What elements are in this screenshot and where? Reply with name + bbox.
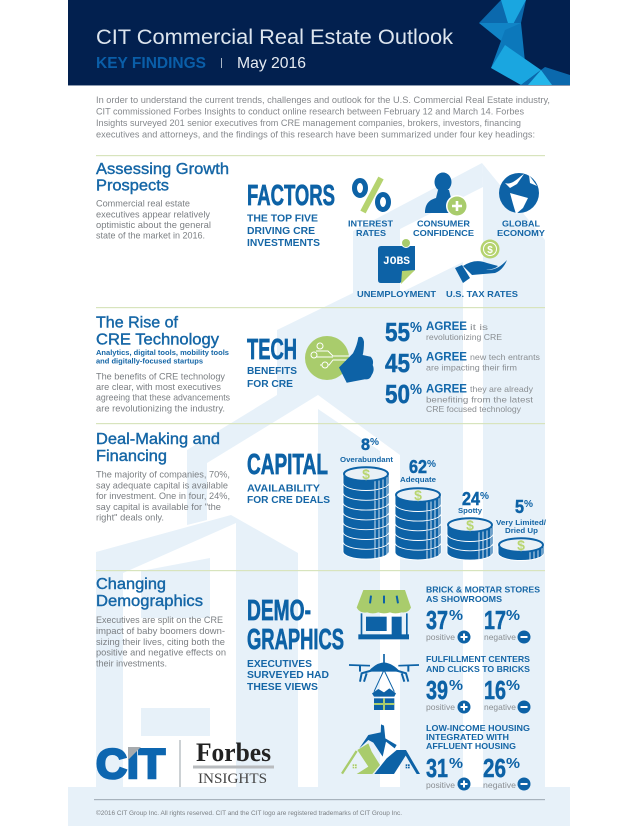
label: fulfillment centers: FULFILLMENT CENTERS <box>426 654 530 664</box>
heading <box>96 161 229 195</box>
stat: 17 percent negative: negative <box>484 632 516 642</box>
label: fulfillment centers <box>426 654 530 674</box>
logo: CIT: CIT <box>96 740 165 787</box>
label: low-income housing: INTEGRATED WITH <box>426 732 509 742</box>
stat: 17 percent negative: % <box>506 607 520 624</box>
label: 24 percent spotty <box>458 489 489 515</box>
body text: are revolutionizing the industry. <box>96 403 225 413</box>
label: brick and mortar: AS SHOWROOMS <box>426 594 502 604</box>
demographics subheading: SURVEYED HAD <box>247 670 329 681</box>
stat: 50 percent: % <box>410 381 422 398</box>
stat: 37 percent positive: % <box>449 607 463 624</box>
stat: 26 percent negative: % <box>506 755 520 772</box>
body text <box>96 199 211 241</box>
stat: 31 percent positive <box>426 753 470 790</box>
stat: 50 percent: benefiting from the latest <box>426 394 534 404</box>
demographics subheading: THESE VIEWS <box>247 682 318 693</box>
stat: 31 percent positive: positive <box>426 780 455 790</box>
body text: executives appear relatively <box>96 209 210 219</box>
label: low-income housing: LOW-INCOME HOUSING <box>426 723 530 733</box>
body text: say capital is available for "the <box>96 502 221 512</box>
label: 8 percent overabundant <box>340 435 393 464</box>
body text <box>96 371 230 413</box>
label: global economy: GLOBAL <box>502 219 540 229</box>
body text: are clear, with most executives <box>96 382 221 392</box>
stat: 17 percent negative <box>484 605 530 644</box>
stat: 16 percent negative <box>484 675 530 714</box>
body text: sizing their lives, citing both the <box>96 637 225 647</box>
header banner <box>68 0 570 86</box>
heading: Prospects <box>96 178 169 195</box>
label: 5 percent very limited <box>496 497 547 535</box>
label: 5 percent very limited: % <box>524 499 533 510</box>
subheading: and digitally-focused startups <box>96 357 203 366</box>
background house watermark <box>68 163 570 826</box>
stat: 39 percent positive: % <box>449 677 463 694</box>
capital subheading: FOR CRE DEALS <box>247 495 330 506</box>
icon: hand with coin <box>455 240 507 283</box>
coin stack: spotty <box>447 517 493 560</box>
icon: houses <box>342 724 420 774</box>
stat: 50 percent: AGREE <box>426 384 467 396</box>
subtitle <box>96 55 306 72</box>
label: 5 percent very limited: 5 <box>515 497 524 517</box>
stat: 37 percent positive: 37 <box>426 605 448 635</box>
icon: jobs <box>378 238 415 284</box>
demographics heading: DEMO- <box>247 595 311 627</box>
coin stack: overabundant <box>343 466 389 559</box>
panel: assessing growth prospects <box>96 161 229 241</box>
body text: impact of baby boomers down- <box>96 626 225 636</box>
label: global economy: ECONOMY <box>497 228 545 238</box>
logo: Forbes Insights: Forbes <box>196 738 271 767</box>
stat: 50 percent: CRE focused technology <box>426 404 522 414</box>
tech subheading <box>247 366 297 390</box>
capital subheading <box>247 484 330 506</box>
label: 8 percent overabundant: Overabundant <box>340 455 393 464</box>
stat: 55 percent <box>385 317 502 347</box>
factors heading: FACTORS <box>247 180 335 212</box>
body text: agreeing that these advancements <box>96 393 230 403</box>
body text <box>96 470 230 523</box>
body text: say adequate capital is available <box>96 480 228 490</box>
stat: 45 percent: % <box>410 350 422 367</box>
stat: 26 percent negative <box>483 753 530 790</box>
icon: percent <box>354 178 388 212</box>
subheading: Analytics, digital tools, mobility tools <box>96 348 229 357</box>
label: consumer confidence: CONFIDENCE <box>413 228 474 238</box>
heading: Changing <box>96 576 166 593</box>
body text <box>96 615 226 668</box>
label: 62 percent adequate: % <box>427 459 436 470</box>
subtitle: KEY FINDINGS <box>96 55 206 72</box>
stat: 45 percent: 45 <box>385 348 410 378</box>
label: tax rates: U.S. TAX RATES <box>446 289 518 299</box>
label: 62 percent adequate: Adequate <box>400 475 436 484</box>
stat: 55 percent: % <box>410 319 422 336</box>
body text: state of the market in 2016. <box>96 231 205 241</box>
coin: very limited <box>498 537 544 560</box>
stat: 16 percent negative: 16 <box>484 675 506 705</box>
label: 62 percent adequate: 62 <box>409 457 427 477</box>
demographics subheading <box>247 659 329 693</box>
subheading <box>96 348 229 366</box>
stat: 37 percent positive <box>426 605 470 644</box>
coin stack: overabundant: $ <box>362 466 370 482</box>
label: 24 percent spotty: 24 <box>462 489 480 509</box>
panel: tech <box>247 317 540 414</box>
tech heading: TECH <box>247 334 297 366</box>
intro paragraph: CIT commissioned Forbes Insights to conduct online research between February 12 and March 14. Forbes <box>96 107 524 117</box>
icon: storefront <box>357 590 411 639</box>
stat: 45 percent: new tech entrants <box>470 352 540 362</box>
heading <box>96 431 220 465</box>
label: 62 percent adequate <box>400 457 436 484</box>
factors subheading: THE TOP FIVE <box>247 214 318 225</box>
stat: 31 percent positive: % <box>449 755 463 772</box>
demographics subheading: EXECUTIVES <box>247 659 312 670</box>
stat: 45 percent: AGREE <box>426 352 467 364</box>
tech subheading: BENEFITS <box>247 366 297 377</box>
label: 5 percent very limited: Very Limited/ <box>496 518 547 527</box>
label: 24 percent spotty: % <box>480 491 489 502</box>
heading: Demographics <box>96 593 203 610</box>
intro paragraph: In order to understand the current trends, challenges and outlook for the U.S. Commercial Real Estate industry, <box>96 95 550 105</box>
logo: Forbes Insights <box>193 738 274 787</box>
body text: The benefits of CRE technology <box>96 371 225 381</box>
stat: 50 percent <box>385 379 534 414</box>
stat: 16 percent negative: % <box>506 677 520 694</box>
stat: 50 percent: they are already <box>470 384 534 394</box>
heading: Assessing Growth <box>96 161 229 178</box>
label: 8 percent overabundant: 8 <box>361 435 370 454</box>
body text: positive and negative effects on <box>96 648 226 658</box>
label: interest rates <box>348 219 394 238</box>
label: 8 percent overabundant: % <box>370 437 379 448</box>
body text: for investment. One in four, 24%, <box>96 491 230 501</box>
stat: 37 percent positive: positive <box>426 632 455 642</box>
logo: Forbes Insights: INSIGHTS <box>198 771 267 787</box>
icon: hand with coin: $ <box>487 245 493 256</box>
stat: 39 percent positive: 39 <box>426 675 448 705</box>
stat: 50 percent: 50 <box>385 379 410 409</box>
intro paragraph: Insights surveyed 201 senior executives from CRE management companies, brokers, investors, financing <box>96 118 521 128</box>
tech subheading: FOR CRE <box>247 379 293 390</box>
stat: 17 percent negative: 17 <box>484 605 506 635</box>
label: interest rates: RATES <box>356 228 386 238</box>
stat: 55 percent: revolutionizing CRE <box>426 332 502 342</box>
intro paragraph: executives and attorneys, and the findings of this research have been summarized under four key headings: <box>96 130 535 140</box>
heading: Deal-Making and <box>96 431 220 448</box>
panel: demographics <box>247 584 540 790</box>
intro paragraph <box>96 95 550 140</box>
stat: 39 percent positive: positive <box>426 702 455 712</box>
body text: Executives are split on the CRE <box>96 615 223 625</box>
heading: CRE Technology <box>96 332 219 349</box>
stat: 26 percent negative: negative <box>483 780 516 790</box>
coin stack: adequate <box>395 487 441 560</box>
footer text: ©2016 CIT Group Inc. All rights reserved. CIT and the CIT logo are registered trademarks of CIT Group Inc. <box>96 809 402 817</box>
stat: 55 percent: it is <box>470 322 488 332</box>
label: 24 percent spotty: Spotty <box>458 506 483 515</box>
label: low-income housing: AFFLUENT HOUSING <box>426 741 516 751</box>
label: global economy <box>497 219 545 238</box>
coin: very limited: $ <box>517 537 525 553</box>
body text: Commercial real estate <box>96 199 190 209</box>
stat: 55 percent: 55 <box>385 317 410 347</box>
factors subheading: DRIVING CRE <box>247 226 315 237</box>
panel: capital <box>247 435 547 560</box>
stat: 39 percent positive <box>426 675 470 714</box>
demographics heading <box>247 595 344 656</box>
demographics heading: GRAPHICS <box>247 624 344 656</box>
panel: factors <box>247 172 545 299</box>
coin stack: spotty: $ <box>466 517 474 533</box>
panel: rise of CRE technology <box>96 315 230 413</box>
panel: changing demographics <box>96 576 226 668</box>
icon: consumer with plus <box>425 172 468 217</box>
label: unemployment: UNEMPLOYMENT <box>357 289 437 299</box>
stat: 16 percent negative: negative <box>484 702 516 712</box>
label: brick and mortar: BRICK & MORTAR STORES <box>426 584 540 594</box>
stat: 55 percent: AGREE <box>426 321 467 333</box>
heading <box>96 315 219 349</box>
title: CIT Commercial Real Estate Outlook <box>96 26 454 49</box>
stat: 31 percent positive: 31 <box>426 753 448 783</box>
heading: The Rise of <box>96 315 179 332</box>
label: brick and mortar <box>426 584 540 604</box>
label: fulfillment centers: AND CLICKS TO BRICKS <box>426 664 530 674</box>
body text: right" deals only. <box>96 513 164 523</box>
icon: delivery drone <box>349 654 419 710</box>
label: consumer confidence: CONSUMER <box>417 219 470 229</box>
panel: deal-making and financing <box>96 431 230 523</box>
capital heading: CAPITAL <box>247 449 328 481</box>
label: low-income housing <box>426 723 530 751</box>
heading <box>96 576 203 610</box>
stat: 45 percent <box>385 348 540 378</box>
capital subheading: AVAILABILITY <box>247 484 320 495</box>
factors subheading <box>247 214 320 249</box>
icon: globe <box>499 173 539 214</box>
coin stack: adequate: $ <box>414 487 422 503</box>
body text: their investments. <box>96 658 167 668</box>
stat: 45 percent: are impacting their firm <box>426 363 517 373</box>
icon: thumbs up with circuit <box>305 336 374 383</box>
factors subheading: INVESTMENTS <box>247 238 320 249</box>
label: interest rates: INTEREST <box>348 219 394 229</box>
icon: jobs: JOBS <box>383 256 410 268</box>
header crystal decoration <box>479 0 570 85</box>
body text: The majority of companies, 70%, <box>96 470 230 480</box>
heading: Financing <box>96 448 167 465</box>
subtitle: May 2016 <box>237 55 306 72</box>
label: consumer confidence <box>413 219 474 238</box>
label: 5 percent very limited: Dried Up <box>505 526 538 535</box>
body text: optimistic about the general <box>96 220 211 230</box>
stat: 26 percent negative: 26 <box>483 753 506 783</box>
